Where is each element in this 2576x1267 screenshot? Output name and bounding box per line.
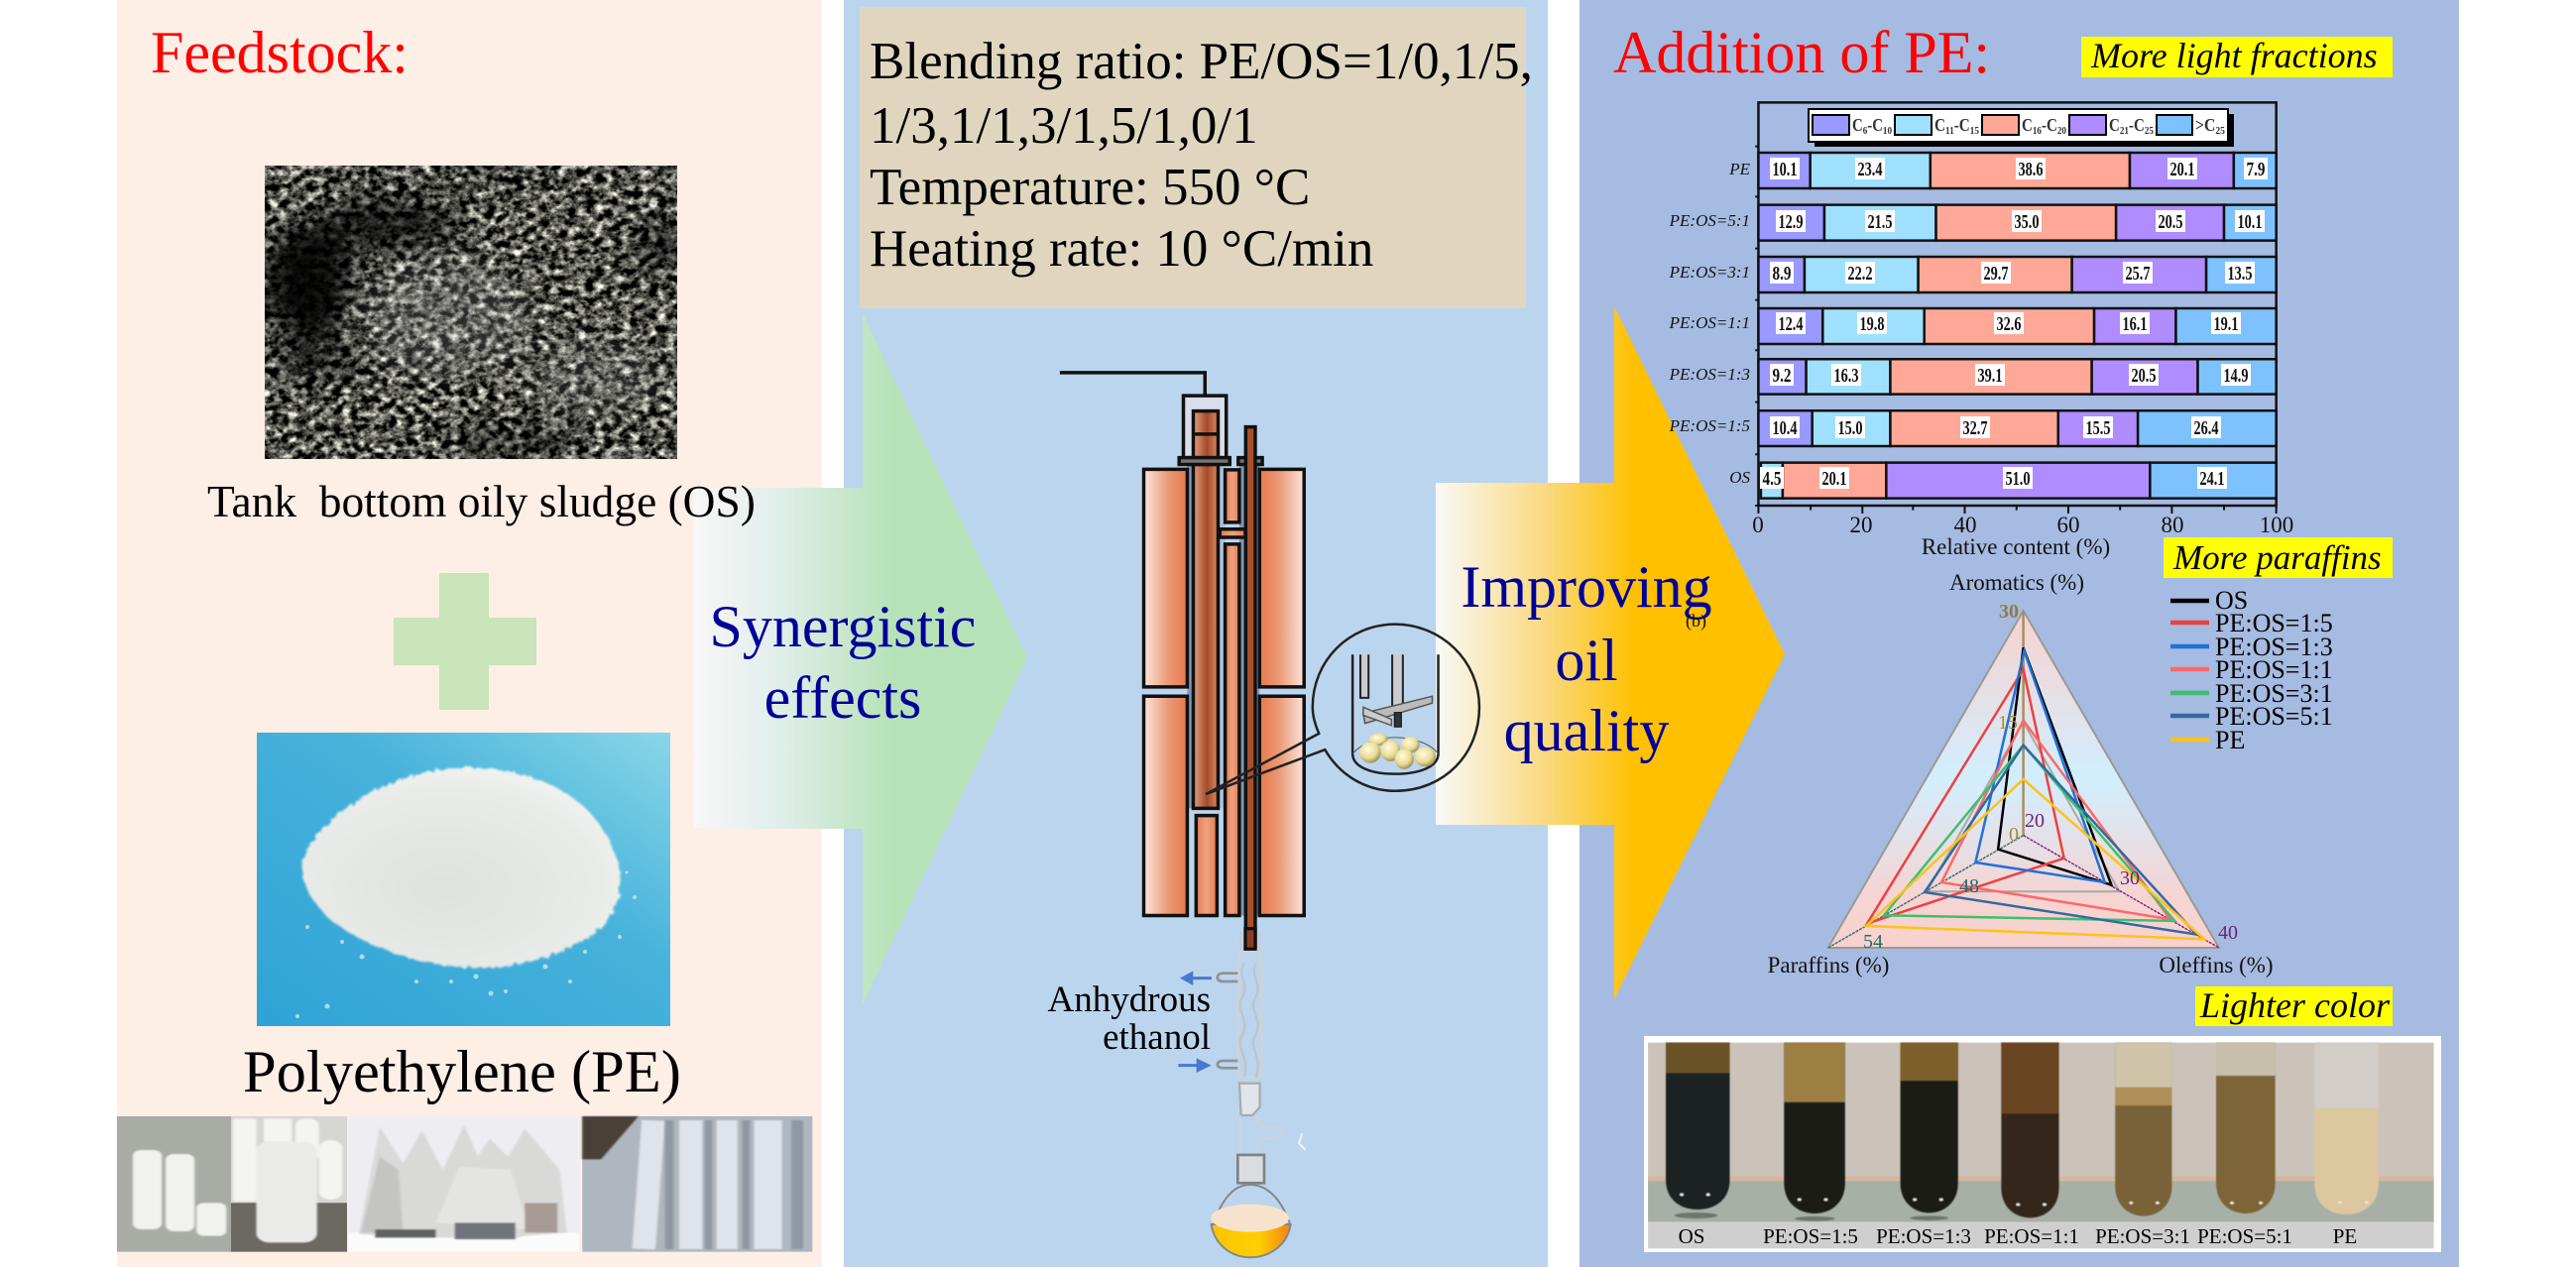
- row labels: OS: [1729, 468, 1750, 487]
- chart legend: -C: [1867, 115, 1883, 135]
- value labels: 23.4: [1858, 159, 1882, 180]
- radar tick labels: 40: [2218, 922, 2238, 944]
- label: oily sludge: Tank bottom oily sludge (OS): [207, 477, 756, 526]
- value labels: 10.1: [2237, 211, 2263, 233]
- x axis title: Relative content (%): [1922, 534, 2110, 559]
- callout: improving oil quality: oil: [1555, 628, 1618, 693]
- callout: improving oil quality: quality: [1504, 698, 1669, 763]
- value labels: 22.2: [1848, 263, 1872, 285]
- chart legend: -C: [1954, 115, 1970, 135]
- tube labels: [1679, 1224, 2357, 1248]
- chart legend: 25: [2215, 125, 2225, 137]
- radar tick labels: 48: [1959, 875, 1979, 897]
- value labels: 16.3: [1834, 365, 1858, 387]
- value labels: 19.8: [1860, 313, 1884, 335]
- value labels: 14.9: [2223, 365, 2249, 387]
- bars: [1755, 102, 2277, 514]
- chart legend: C: [2022, 115, 2035, 135]
- x axis tick labels: 20: [1850, 513, 1872, 537]
- heading: addition of PE: Addition of PE:: [1613, 20, 1990, 85]
- tag: more light fractions: More light fractions: [2090, 36, 2378, 75]
- panel label (b): (b): [1686, 611, 1706, 632]
- chart legend: 16: [2033, 125, 2042, 137]
- value labels: 10.4: [1773, 417, 1797, 439]
- radar legend: PE:OS=5:1: [2215, 702, 2333, 731]
- chart: stacked bars of carbon fractions: [1669, 102, 2293, 559]
- value labels: 39.1: [1977, 365, 2003, 387]
- photo: oily sludge: [263, 163, 689, 459]
- chart legend: 20: [2057, 125, 2066, 137]
- tag: lighter color: Lighter color: [2199, 985, 2391, 1025]
- label: anhydrous ethanol: ethanol: [1103, 1017, 1211, 1058]
- arrow: improving oil quality: [1436, 306, 1785, 999]
- callout: improving oil quality: Improving: [1461, 554, 1712, 620]
- value labels: 32.7: [1963, 417, 1987, 439]
- chart legend: C: [2109, 115, 2122, 135]
- tube labels: PE:OS=5:1: [2197, 1224, 2292, 1248]
- photo: polyethylene powder: [257, 733, 670, 1026]
- value labels: 32.6: [1997, 313, 2021, 335]
- chart legend: C: [1934, 115, 1947, 135]
- tube labels: PE:OS=1:3: [1876, 1224, 1971, 1248]
- box: process conditions: Blending ratio: PE/OS=1/0,1/5,: [870, 33, 1533, 90]
- panel: addition of PE results: [1580, 0, 2459, 1267]
- chart legend: -C: [2042, 115, 2057, 135]
- x axis tick labels: 80: [2162, 513, 2183, 537]
- radar legend: PE:OS=1:5: [2215, 609, 2333, 637]
- x axis tick labels: 0: [1752, 513, 1764, 537]
- value labels: 25.7: [2126, 263, 2150, 285]
- photos: PE products: [117, 1116, 812, 1252]
- chart legend: -C: [2129, 115, 2145, 135]
- row labels: PE:OS=1:3: [1669, 365, 1750, 384]
- radar tick labels: [1863, 601, 2238, 953]
- diagram: condenser and flask: [1178, 929, 1306, 1257]
- radar legend: PE:OS=3:1: [2215, 679, 2333, 708]
- radar tick labels: 0: [2009, 824, 2019, 846]
- radar legend: PE:OS=1:3: [2215, 633, 2333, 661]
- row labels: PE:OS=5:1: [1669, 211, 1750, 230]
- chart legend: [1809, 109, 2234, 147]
- tube labels: PE:OS=1:1: [1984, 1224, 2079, 1248]
- value labels: 15.5: [2086, 417, 2110, 439]
- radar tick labels: 20: [2025, 810, 2045, 832]
- diagram: pyrolysis reactor: [1060, 373, 1304, 947]
- arrow: synergistic effects: [693, 313, 1027, 1004]
- row labels: PE:OS=3:1: [1669, 263, 1750, 282]
- value labels: 4.5: [1763, 468, 1781, 490]
- chart: ternary radar of aromatics, olefins, paraffins: [1768, 570, 2333, 978]
- photo: oil samples in test tubes: [1644, 1036, 2441, 1252]
- value labels: 16.1: [2122, 313, 2148, 335]
- chart legend: 15: [1970, 125, 1979, 137]
- label: anhydrous ethanol: Anhydrous: [1048, 979, 1211, 1020]
- callout: synergistic effects: Synergistic: [710, 594, 976, 659]
- value labels: 12.9: [1779, 211, 1803, 233]
- chart legend: 11: [1945, 125, 1954, 137]
- chart legend: 10: [1883, 125, 1892, 137]
- box: process conditions: 1/3,1/1,3/1,5/1,0/1: [870, 97, 1258, 155]
- x axis tick labels: [1752, 513, 2293, 537]
- icon: plus sign: [394, 573, 536, 710]
- box: process conditions: Heating rate: 10 °C/min: [870, 220, 1373, 278]
- label: polyethylene: Polyethylene (PE): [243, 1039, 681, 1105]
- panel: feedstock: [117, 0, 822, 1267]
- radar axis labels: Paraffins (%): [1768, 953, 1889, 978]
- tag: more paraffins: More paraffins: [2172, 538, 2382, 577]
- tube labels: OS: [1679, 1224, 1704, 1248]
- x axis tick labels: 60: [2056, 513, 2080, 537]
- value labels: 20.5: [2132, 365, 2156, 387]
- chart legend: 21: [2120, 125, 2129, 137]
- radar axis labels: [1768, 570, 2274, 978]
- box: process conditions: Temperature: 550 °C: [870, 159, 1310, 216]
- value labels: 51.0: [2005, 468, 2031, 490]
- row labels: [1669, 160, 1751, 487]
- value labels: 24.1: [2199, 468, 2225, 490]
- value labels: 38.6: [2019, 159, 2043, 180]
- value labels: 15.0: [1838, 417, 1862, 439]
- value labels: 20.1: [2169, 159, 2195, 180]
- radar legend: [2170, 586, 2333, 754]
- x axis tick labels: 40: [1953, 513, 1977, 537]
- panel: process conditions: [844, 0, 1548, 1267]
- value labels: 20.5: [2158, 211, 2183, 233]
- value labels: 20.1: [1822, 468, 1846, 490]
- radar legend: OS: [2215, 586, 2248, 615]
- box: process conditions: [860, 7, 1533, 308]
- chart legend: >C: [2195, 115, 2218, 135]
- value labels: [1760, 158, 2268, 490]
- chart legend: C: [1852, 115, 1865, 135]
- radar tick labels: 30: [1999, 601, 2019, 623]
- value labels: 13.5: [2227, 263, 2253, 285]
- radar axis labels: Oleffins (%): [2159, 953, 2274, 978]
- row labels: PE:OS=1:5: [1669, 416, 1750, 435]
- radar legend: PE: [2215, 726, 2245, 754]
- value labels: 8.9: [1773, 263, 1791, 285]
- tube labels: PE: [2333, 1224, 2357, 1248]
- row labels: PE: [1728, 160, 1751, 178]
- value labels: 12.4: [1779, 313, 1803, 335]
- radar axis labels: Aromatics (%): [1949, 570, 2084, 595]
- value labels: 35.0: [2015, 211, 2039, 233]
- tube labels: PE:OS=3:1: [2095, 1224, 2190, 1248]
- value labels: 9.2: [1773, 365, 1791, 387]
- row labels: PE:OS=1:1: [1669, 313, 1750, 332]
- value labels: 29.7: [1983, 263, 2009, 285]
- icon: magnified catalyst basket: [1206, 625, 1479, 794]
- radar tick labels: 15: [1998, 712, 2018, 734]
- heading: feedstock: Feedstock:: [151, 20, 409, 85]
- value labels: 10.1: [1773, 159, 1797, 180]
- value labels: 7.9: [2247, 159, 2265, 180]
- value labels: 19.1: [2213, 313, 2239, 335]
- callout: synergistic effects: effects: [764, 665, 921, 731]
- value labels: 21.5: [1868, 211, 1892, 233]
- value labels: 26.4: [2193, 417, 2219, 439]
- chart legend: 25: [2145, 125, 2154, 137]
- chart legend: 6: [1863, 125, 1868, 137]
- radar tick labels: 30: [2120, 867, 2140, 889]
- radar legend: PE:OS=1:1: [2215, 655, 2333, 684]
- tube labels: PE:OS=1:5: [1763, 1224, 1858, 1248]
- radar tick labels: 54: [1863, 931, 1883, 953]
- x axis tick labels: 100: [2260, 513, 2293, 537]
